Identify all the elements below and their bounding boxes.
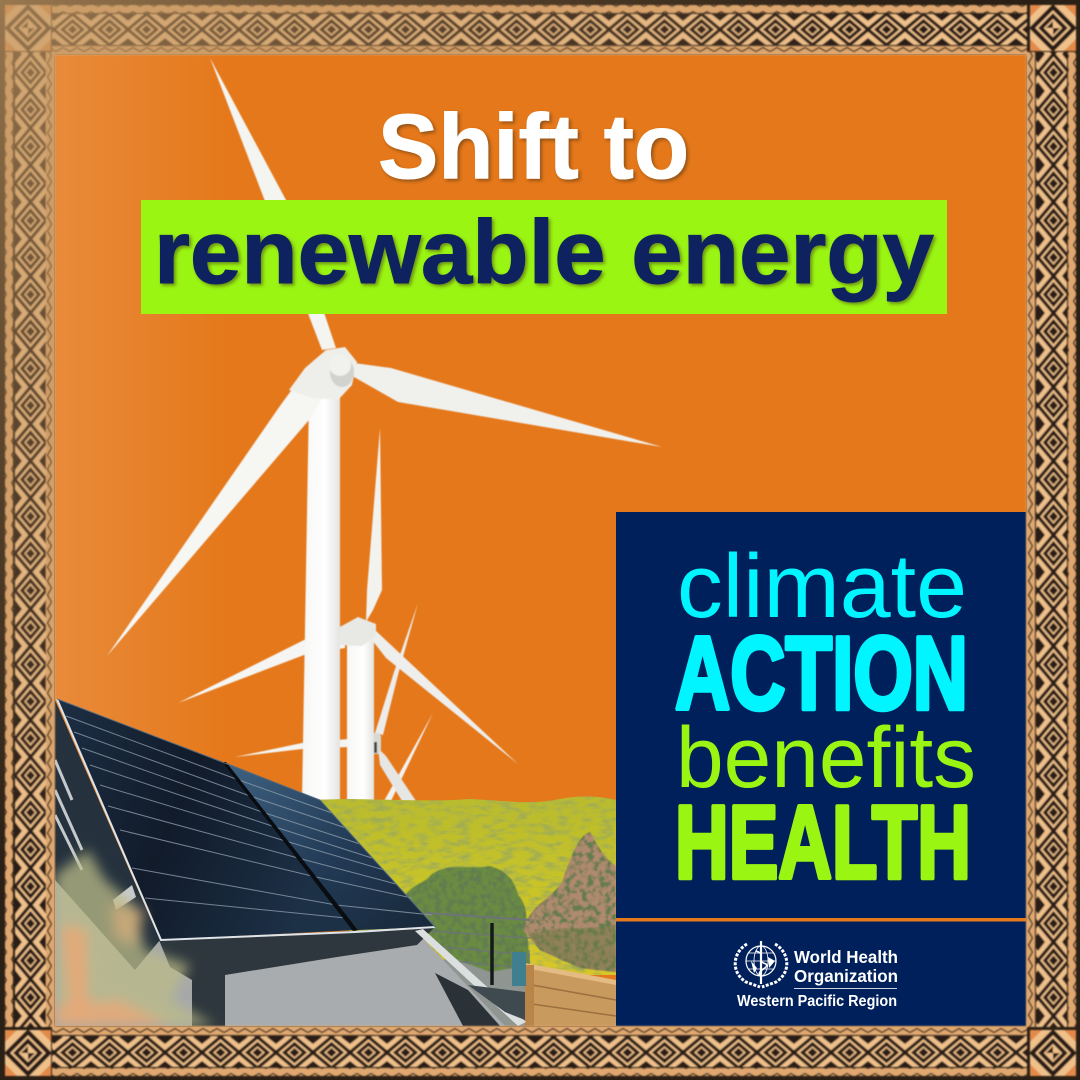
illustration: wooden planter <box>525 963 616 1026</box>
text: Western Pacific Region: Western Pacific Region <box>737 993 897 1010</box>
illustration: rooftop <box>55 700 526 1026</box>
illustration: green bush <box>403 866 530 972</box>
turbine: third turbine <box>235 603 418 801</box>
illustration: grassy hill <box>318 796 616 1026</box>
illustration: panel grid lines <box>66 716 432 918</box>
text: climate: climate <box>677 537 967 637</box>
text: Organization: Organization <box>794 966 898 986</box>
divider: orange rule <box>616 918 1026 922</box>
turbine: far turbine blades <box>384 713 433 801</box>
heading: renewable energy on green bar: renewable energy <box>154 203 934 303</box>
icon: panel bracket <box>113 885 136 910</box>
illustration: solar panels <box>55 699 435 1026</box>
text: ACTION: ACTION <box>675 616 968 732</box>
turbine: main turbine <box>107 58 662 800</box>
illustration: blurred foreground foliage <box>55 850 215 1026</box>
illustration: ground behind railing <box>440 950 530 1026</box>
heading: Shift to: Shift to <box>378 96 689 198</box>
logo: World Health Organization <box>735 941 898 1010</box>
illustration: pink flowering plant <box>523 832 616 972</box>
illustration: shadow under panels <box>159 927 435 1026</box>
text: benefits: benefits <box>676 710 976 806</box>
illustration: balcony railing <box>426 913 530 985</box>
illustration: wind turbines <box>107 58 662 801</box>
text: World Health: World Health <box>794 947 898 967</box>
panel: climate action benefits health <box>616 512 1026 1026</box>
turbine: second turbine <box>178 428 518 801</box>
icon: WHO emblem <box>735 941 787 987</box>
text: HEALTH: HEALTH <box>675 785 971 901</box>
